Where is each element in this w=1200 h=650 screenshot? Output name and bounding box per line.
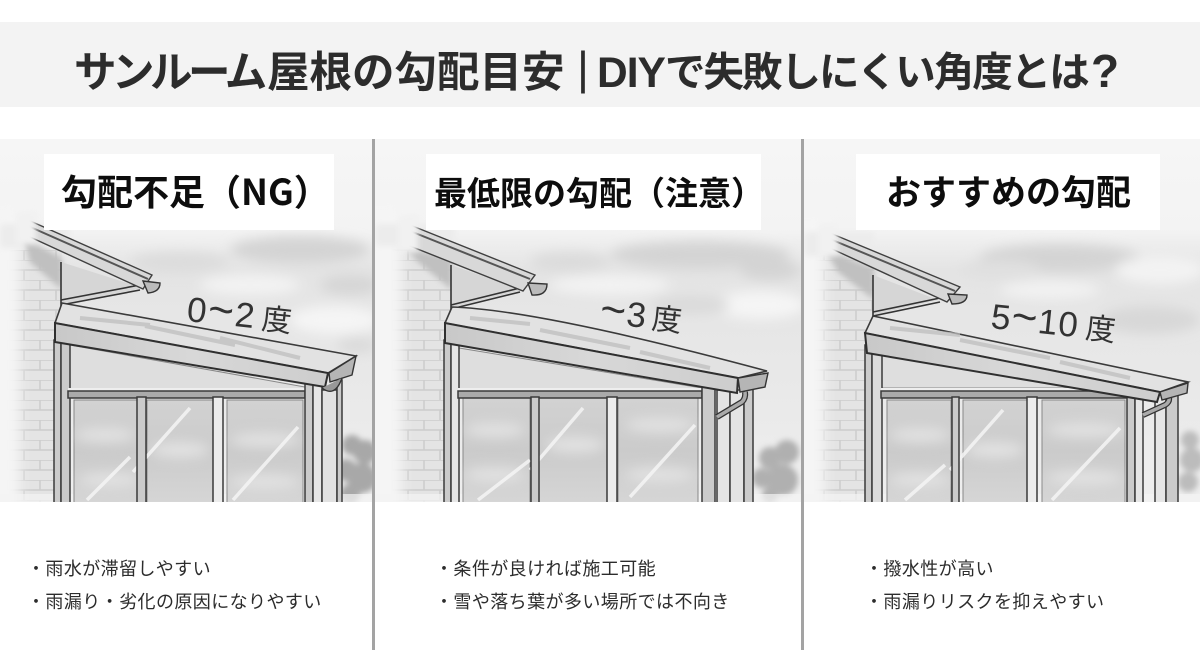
title text: 屋根の勾配目安 xyxy=(267,50,565,97)
degree label: 5~10度 xyxy=(989,289,1119,351)
panel: 最低限の勾配 (注意) xyxy=(350,139,805,614)
bullet list: ・雨水が滞留しやすい xyxy=(27,555,211,581)
sunroom glazing xyxy=(882,355,1125,504)
bullet list: ・雨漏り・劣化の原因になりやすい xyxy=(27,588,322,614)
illustration: sunroom with 0-2 degree roof xyxy=(0,139,380,525)
illustration: sunroom with about 3 degree roof xyxy=(375,139,801,502)
title text: で失敗しにくい角度とは xyxy=(665,49,1089,95)
divider xyxy=(372,139,375,650)
sunroom glazing xyxy=(459,348,702,504)
bullet list: ・撥水性が高い xyxy=(865,555,994,581)
sunroom roof xyxy=(865,316,1188,402)
illustration: sunroom with 5-10 degree roof xyxy=(804,139,1200,502)
degree label: 0~2度 xyxy=(185,282,296,342)
title text: ? xyxy=(1091,45,1119,97)
sunroom glazing xyxy=(70,345,305,504)
bullet list: ・雨漏りリスクを抑えやすい xyxy=(865,588,1104,614)
title text: DIY xyxy=(597,50,666,97)
house eave xyxy=(829,234,968,316)
title text: サンルーム xyxy=(74,50,266,97)
house eave xyxy=(401,226,548,310)
heading text: おすすめの勾配 xyxy=(886,165,1131,216)
bullet list xyxy=(27,555,322,614)
bullet list xyxy=(865,555,1104,614)
sunroom frame xyxy=(865,345,1178,510)
heading box xyxy=(44,154,334,230)
sunroom roof xyxy=(445,307,768,393)
sunroom roof xyxy=(55,303,356,391)
heading box xyxy=(426,154,764,230)
degree label: ~3度 xyxy=(598,284,686,342)
bullet list xyxy=(435,555,730,614)
divider xyxy=(801,139,804,650)
house eave xyxy=(24,221,161,306)
sunroom frame xyxy=(54,340,342,510)
title band xyxy=(0,22,1200,107)
panel: 勾配不足 (NG) xyxy=(0,139,380,614)
bullet list: ・雪や落ち葉が多い場所では不向き xyxy=(435,588,730,614)
panel: おすすめの勾配 xyxy=(785,139,1200,614)
sunroom frame xyxy=(444,340,753,510)
bullet list: ・条件が良ければ施工可能 xyxy=(435,555,656,581)
heading text: 最低限の勾配（注意） xyxy=(434,167,764,215)
heading text: 勾配不足（NG） xyxy=(61,164,330,216)
heading box xyxy=(856,154,1160,230)
title text: | xyxy=(577,42,589,94)
